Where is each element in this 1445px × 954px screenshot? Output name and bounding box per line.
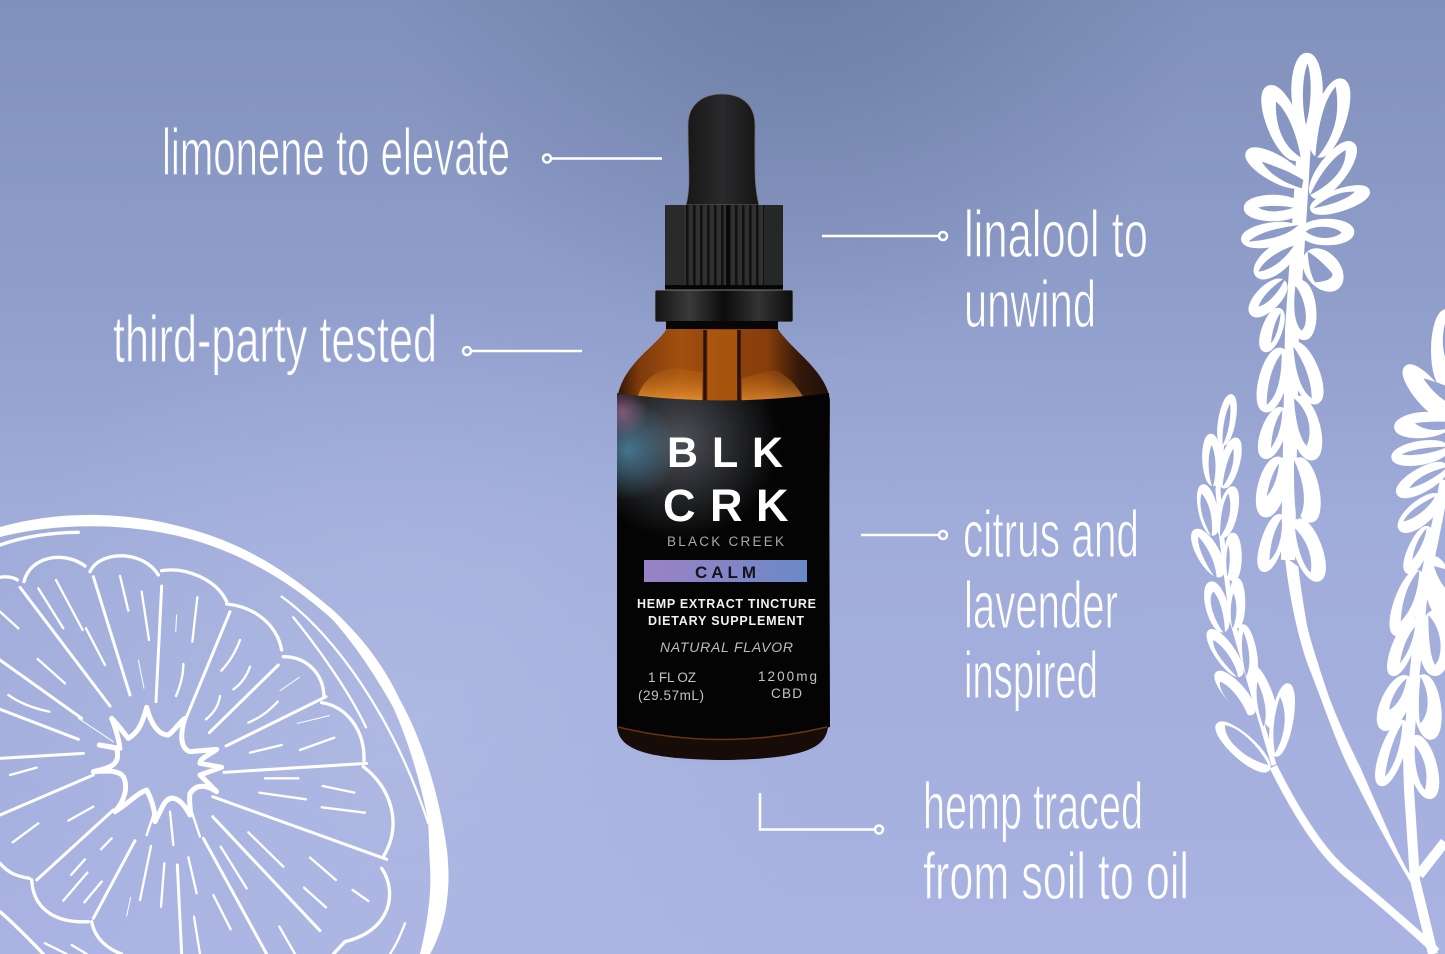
glass base — [617, 725, 828, 760]
brand name: BLK — [667, 429, 783, 477]
callout: limonene: limonene to elevate — [162, 115, 510, 189]
volume: (29.57mL) — [638, 688, 704, 703]
potency: CBD — [771, 686, 802, 701]
potency — [758, 669, 817, 701]
product description: DIETARY SUPPLEMENT — [648, 614, 804, 628]
callout: citrus and lavender: inspired — [964, 638, 1098, 712]
callout: linalool — [822, 197, 1148, 341]
callout: citrus and lavender — [861, 497, 1139, 712]
small sprig spine — [1218, 440, 1274, 765]
brand subtitle: BLACK CREEK — [667, 534, 784, 549]
potency: 1200mg — [758, 669, 817, 684]
citrus core — [93, 707, 222, 822]
illustration: citrus slice — [0, 515, 448, 954]
callout: linalool: unwind — [964, 267, 1096, 341]
callout: linalool: linalool to — [964, 197, 1148, 271]
product: dropper bottle — [610, 94, 840, 760]
callout: hemp traced: hemp traced — [923, 769, 1143, 843]
bottle shadow — [630, 400, 820, 756]
illustration: small lavender sprig — [1188, 395, 1437, 952]
citrus segments — [0, 532, 428, 954]
right sprig stem — [1408, 480, 1445, 954]
callout: hemp traced — [760, 769, 1189, 913]
dropper bulb — [686, 94, 759, 205]
bottle base edge — [618, 727, 827, 740]
small sprig stem — [1273, 767, 1437, 952]
right sprig florets — [1374, 313, 1445, 798]
bottle label — [610, 390, 840, 740]
product description — [637, 597, 816, 628]
callout: third-party tested: third-party tested — [113, 302, 437, 376]
cap collar — [655, 285, 793, 329]
glass highlights — [636, 330, 806, 405]
brand name: CRK — [663, 480, 789, 531]
calm band — [644, 560, 807, 582]
product description: HEMP EXTRACT TINCTURE — [637, 597, 816, 611]
ribbed cap — [665, 205, 783, 288]
citrus rind — [0, 515, 448, 954]
small sprig florets — [1188, 395, 1297, 777]
flavor: NATURAL FLAVOR — [660, 639, 793, 655]
illustration: large lavender sprig — [1244, 57, 1412, 882]
large sprig stem — [1285, 557, 1412, 882]
amber glass — [617, 326, 830, 760]
callout: citrus and lavender: citrus and — [963, 497, 1139, 571]
large sprig spine — [1288, 125, 1305, 560]
large sprig florets — [1244, 57, 1368, 581]
calm band: CALM — [695, 563, 756, 582]
callout: citrus and lavender: lavender — [964, 568, 1118, 642]
volume: 1 FL OZ — [648, 670, 696, 685]
brand name — [663, 429, 789, 531]
illustration: right lavender sprig — [1374, 313, 1445, 954]
volume — [638, 670, 704, 703]
callout: hemp traced: from soil to oil — [923, 839, 1189, 913]
